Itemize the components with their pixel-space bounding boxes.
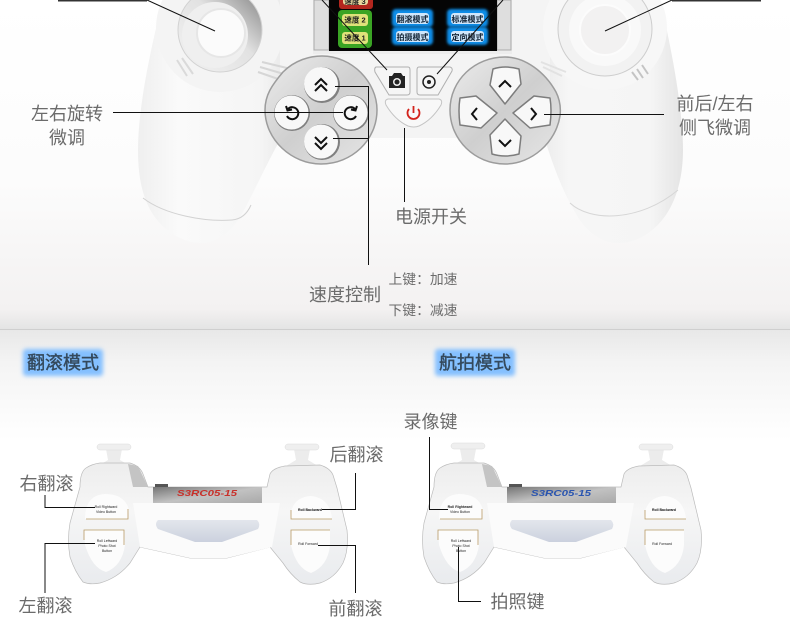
icon: left arrow — [472, 108, 477, 120]
label: 前后/左右侧飞微调: 侧飞微调 — [679, 118, 751, 138]
label: 左翻滚: 左翻滚 — [18, 596, 72, 616]
centre plate — [487, 503, 634, 558]
shell — [68, 463, 348, 584]
left grip — [138, 0, 300, 243]
screen: 标准模式 — [452, 14, 484, 24]
brand text: S3RC05-15 — [177, 488, 237, 498]
trigger L2 — [438, 530, 479, 572]
light bar — [156, 520, 259, 542]
screen: 翻滚模式 — [396, 14, 428, 24]
label: 后翻滚: 后翻滚 — [330, 445, 384, 465]
icon: record — [423, 76, 435, 88]
label: 速度控制: 速度控制 — [309, 285, 381, 305]
screen — [313, 0, 512, 54]
left button disc — [265, 56, 377, 164]
trigger L1: Roll Rightward — [95, 505, 117, 509]
label: 前后/左右侧飞微调: 前后/左右 — [676, 94, 754, 114]
label: 拍照键: 拍照键 — [490, 592, 544, 612]
heading: 翻滚模式: 翻滚模式 — [27, 353, 99, 373]
label: 右翻滚: 右翻滚 — [20, 474, 74, 494]
trigger L1: Roll Rightward — [448, 505, 472, 509]
trigger R1: Roll Backward — [652, 508, 676, 512]
icon: rotate right — [345, 106, 357, 119]
screen: 速度 1 — [344, 32, 366, 42]
light bar — [510, 520, 613, 542]
controller: top view — [138, 0, 683, 243]
power button — [385, 99, 442, 127]
label: 左右旋转微调: 左右旋转 — [31, 104, 103, 124]
trigger R1 — [644, 496, 686, 519]
trigger R2: Roll Forward — [298, 542, 318, 546]
trigger L2: Button — [102, 549, 112, 553]
label: 前翻滚: 前翻滚 — [328, 599, 382, 619]
centre body — [280, 0, 550, 138]
screen: 速度 2 — [344, 14, 366, 24]
left stick — [156, 0, 287, 92]
leader lines: top view — [58, 0, 761, 265]
background: upper section — [0, 0, 790, 329]
heading: 翻滚模式 — [23, 349, 103, 376]
icon: up arrow — [499, 81, 511, 87]
shell — [422, 463, 702, 584]
centre plate — [133, 503, 280, 558]
thumbsticks — [451, 443, 673, 466]
trigger L2 — [84, 530, 125, 572]
controller: rear view, roll mode — [68, 444, 348, 584]
trigger L2: Roll Leftward — [451, 539, 471, 543]
icon: double up chevron — [315, 79, 327, 91]
trigger R1: Roll Backward — [298, 508, 322, 512]
label: 下键减速: 下键：减速 — [388, 303, 458, 318]
right stick — [541, 0, 667, 90]
trigger R2 — [291, 530, 330, 573]
leader lines: rear views — [45, 437, 481, 602]
heading: 航拍模式 — [435, 349, 515, 376]
right button disc — [450, 57, 560, 164]
trigger R1 — [290, 496, 332, 519]
grey panel — [507, 487, 616, 504]
trigger L1: Video Button — [96, 510, 116, 514]
icon: down arrow — [499, 140, 511, 146]
grey panel — [153, 487, 262, 504]
right grip — [520, 0, 683, 243]
label: 电源开关: 电源开关 — [395, 207, 467, 227]
icon: power — [408, 106, 420, 119]
label: 录像键: 录像键 — [404, 412, 458, 432]
trigger R2: Roll Forward — [652, 542, 672, 546]
camera button — [375, 67, 410, 95]
background: lower section — [0, 330, 790, 440]
icon: double down chevron — [315, 137, 327, 149]
label: 左右旋转微调 — [31, 104, 103, 148]
trigger R2 — [645, 530, 684, 573]
screen: 拍摄模式 — [396, 32, 428, 42]
trigger L1 — [85, 494, 129, 519]
icon: rotate left — [286, 106, 298, 119]
trigger L2: Button — [456, 549, 466, 553]
label: 前后/左右侧飞微调 — [676, 94, 754, 138]
label: 左右旋转微调: 微调 — [49, 128, 85, 148]
trigger L2: Roll Leftward — [97, 539, 117, 543]
icon: right arrow — [531, 108, 536, 120]
screen: 定向模式 — [452, 32, 484, 42]
trigger L1 — [439, 494, 483, 519]
heading: 航拍模式: 航拍模式 — [439, 353, 511, 373]
thumbsticks — [97, 444, 319, 466]
trigger L2: Photo Shot — [452, 544, 470, 548]
icon: camera — [389, 73, 405, 88]
trigger L1: Video Button — [450, 510, 470, 514]
label: 上键加速: 上键：加速 — [388, 272, 458, 287]
record button — [417, 67, 452, 95]
brand text: S3RC05-15 — [531, 488, 591, 498]
controller: rear view, aerial mode — [422, 443, 702, 584]
trigger L2: Photo Shot — [98, 544, 116, 548]
